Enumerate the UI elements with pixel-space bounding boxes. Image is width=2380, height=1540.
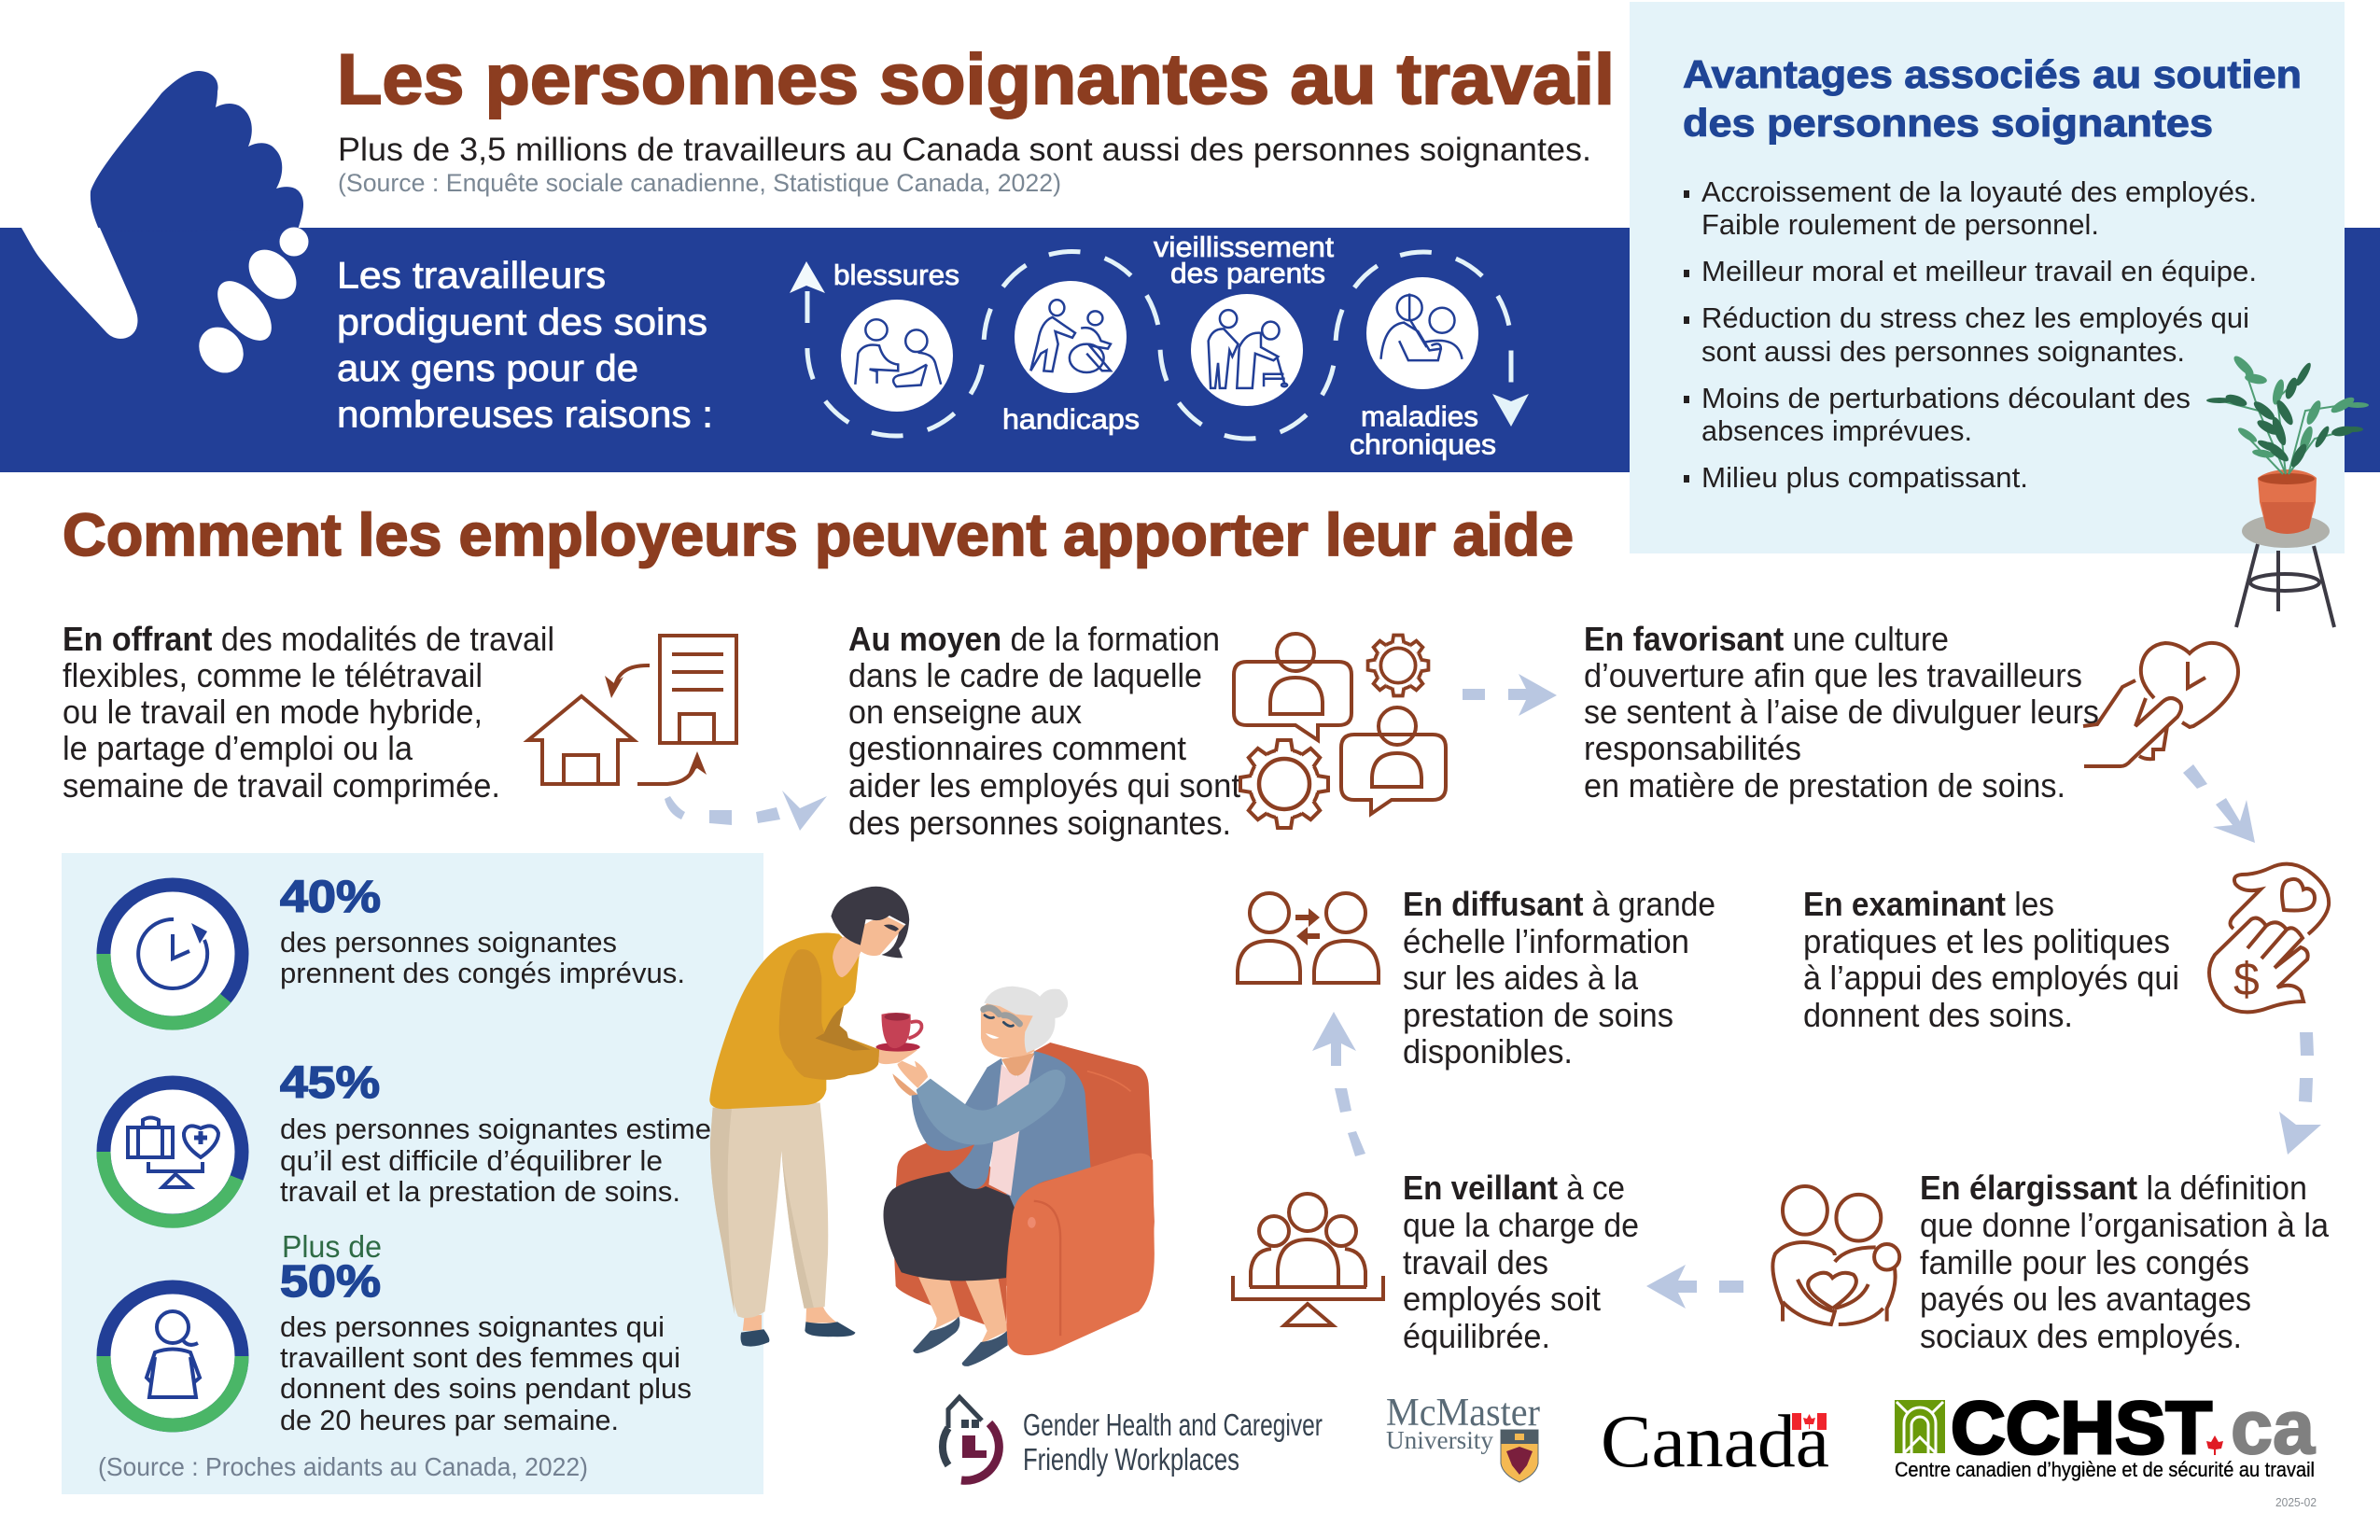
section heading: Comment les employeurs peuvent apporter leur aide xyxy=(63,501,1574,568)
subtitle: Plus de 3,5 millions de travailleurs au Canada sont aussi des personnes soignantes. xyxy=(338,132,1591,168)
stat: plus de 50%: donnent des soins pendant plus xyxy=(280,1372,692,1405)
arrow: dashed to step 2 xyxy=(665,791,827,831)
step: En diffusant: sur les aides à la xyxy=(1403,959,1639,997)
source note: (Source : Enquête sociale canadienne, Statistique Canada, 2022) xyxy=(338,169,1061,197)
stat: 45% xyxy=(280,1058,711,1208)
reason: vieillissement des parents: des parents xyxy=(1170,257,1325,289)
arrow: dashed to step 6 xyxy=(1646,1265,1743,1309)
stat ring: 50% xyxy=(104,1287,242,1425)
date code: 2025-02 xyxy=(2275,1495,2317,1509)
icon: family with heart xyxy=(1772,1186,1899,1324)
step: Au moyen: dans le cadre de laquelle xyxy=(848,656,1202,694)
stat: plus de 50%: de 20 heures par semaine. xyxy=(280,1404,619,1436)
icon: helping hand xyxy=(21,71,308,382)
reason: vieillissement des parents xyxy=(1154,231,1334,406)
bullet list: Accroissement de la loyauté des employés. xyxy=(1701,175,2257,208)
step: En examinant: à l’appui des employés qui xyxy=(1803,959,2179,997)
icon: clock xyxy=(138,919,207,988)
logo: Canada wordmark: Canada xyxy=(1601,1401,1829,1483)
reason: handicaps: handicaps xyxy=(1002,403,1140,435)
step: En élargissant xyxy=(1920,1169,2330,1355)
step: En favorisant: d’ouverture afin que les travailleurs xyxy=(1584,656,2082,694)
icon: hand with heart and dollar: $ xyxy=(2233,953,2260,1005)
step: En diffusant: disponibles. xyxy=(1403,1032,1573,1071)
logo: CCHST.ca: CCHST xyxy=(1951,1386,2212,1469)
logo: Gender Health and Caregiver Friendly Workplaces: Gender Health and Caregiver xyxy=(1023,1407,1323,1442)
icon: heart clock in hand xyxy=(2083,643,2238,766)
band statement: Les travailleurs xyxy=(337,256,606,297)
step: En favorisant: en matière de prestation de soins. xyxy=(1584,766,2065,805)
band statement: nombreuses raisons : xyxy=(337,394,713,435)
stat: 40%: des personnes soignantes xyxy=(280,926,617,959)
step: En favorisant: se sentent à l’aise de divulguer leurs xyxy=(1584,693,2099,731)
stat: 40%: prennent des congés imprévus. xyxy=(280,957,685,989)
step: En élargissant: En élargissant la définition xyxy=(1920,1169,2307,1207)
step: En favorisant xyxy=(1584,620,2099,805)
step: En offrant: flexibles, comme le télétravail xyxy=(63,656,483,694)
logo: McMaster University xyxy=(1386,1392,1540,1482)
step: En examinant: donnent des soins. xyxy=(1803,996,2073,1034)
stat: 45%: qu’il est difficile d’équilibrer le xyxy=(280,1144,663,1177)
armchair back xyxy=(894,1043,1155,1324)
icon: training people and gears xyxy=(1234,634,1446,828)
step: En offrant xyxy=(63,620,554,805)
icon: woman xyxy=(147,1311,200,1397)
icon: house and office xyxy=(528,636,737,784)
reason: maladies chroniques: maladies xyxy=(1361,399,1478,433)
logo: CCHST.ca: Centre canadien d’hygiène et de sécurité au travail xyxy=(1895,1458,2315,1481)
bullet list: Faible roulement de personnel. xyxy=(1701,208,2099,241)
reason: maladies chroniques: chroniques xyxy=(1350,427,1496,461)
step: Au moyen: Au moyen de la formation xyxy=(848,620,1220,658)
caregiver xyxy=(709,887,917,1347)
reason: blessures: blessures xyxy=(833,259,959,291)
statistics source note: (Source : Proches aidants au Canada, 2022) xyxy=(98,1452,588,1481)
logo: CCHST.ca: ca xyxy=(2231,1385,2316,1470)
stat: plus de 50%: des personnes soignantes qui xyxy=(280,1310,665,1343)
title: Les personnes soignantes au travail xyxy=(337,40,1615,119)
panel heading: Avantages associés au soutien xyxy=(1683,52,2302,96)
step: En examinant: En examinant les xyxy=(1803,885,2054,923)
step: En élargissant: famille pour les congés xyxy=(1920,1243,2249,1281)
illustration: caregiver serving tea to elderly woman xyxy=(709,887,1155,1366)
step: Au moyen xyxy=(848,620,1240,842)
step: En veillant xyxy=(1403,1169,1639,1355)
step: En veillant: que la charge de xyxy=(1403,1206,1639,1244)
band statement: prodiguent des soins xyxy=(337,302,707,343)
step: En examinant xyxy=(1803,885,2179,1034)
bullet list: Milieu plus compatissant. xyxy=(1701,461,2028,494)
step: En offrant: En offrant des modalités de travail xyxy=(63,620,554,658)
icon: balanced team xyxy=(1233,1194,1383,1325)
stat: 45%: travail et la prestation de soins. xyxy=(280,1175,680,1208)
logo: Gender Health and Caregiver Friendly Workplaces xyxy=(943,1397,1323,1480)
step: Au moyen: des personnes soignantes. xyxy=(848,804,1231,842)
step: En veillant: équilibrée. xyxy=(1403,1317,1550,1355)
panel: statistics xyxy=(62,853,763,1494)
reason: blessures xyxy=(833,259,959,412)
step: En diffusant: échelle l’information xyxy=(1403,922,1689,960)
icon: hand with heart and dollar xyxy=(2209,864,2329,1012)
stat: 45%: 45% xyxy=(280,1058,380,1108)
step: En examinant: pratiques et les politiques xyxy=(1803,922,2170,960)
logo: Gender Health and Caregiver Friendly Workplaces: Friendly Workplaces xyxy=(1023,1442,1239,1477)
step: En veillant: travail des xyxy=(1403,1243,1548,1281)
step: En élargissant: sociaux des employés. xyxy=(1920,1317,2242,1355)
reason: vieillissement des parents: vieillissement xyxy=(1154,231,1334,263)
icon: two people exchanging xyxy=(1238,893,1379,983)
tea cup xyxy=(875,1013,921,1052)
step: En diffusant: prestation de soins xyxy=(1403,996,1673,1034)
stat: 40%: 40% xyxy=(280,873,381,922)
step: En veillant: En veillant à ce xyxy=(1403,1169,1625,1207)
stat: plus de 50%: 50% xyxy=(280,1257,381,1307)
logo: McMaster University: McMaster xyxy=(1386,1392,1540,1435)
arrow: dashed to step 3 xyxy=(1463,674,1557,716)
arrow: dashed upward to step 7 xyxy=(1312,1012,1365,1156)
logo: McMaster University: University xyxy=(1386,1426,1493,1454)
step: En offrant: le partage d’emploi ou la xyxy=(63,729,413,767)
bullet list: Réduction du stress chez les employés qui xyxy=(1701,301,2249,334)
reason: handicaps xyxy=(1002,281,1140,435)
arrow: dashed to step 4 xyxy=(2183,764,2255,843)
step: Au moyen: on enseigne aux xyxy=(848,693,1082,731)
step: Au moyen: gestionnaires comment xyxy=(848,729,1186,767)
step: En offrant: semaine de travail comprimée. xyxy=(63,766,500,805)
step: En diffusant xyxy=(1403,885,1715,1071)
panel heading xyxy=(1683,52,2302,145)
illustration: potted plant on stool xyxy=(2206,354,2369,627)
stat: 45%: des personnes soignantes estime xyxy=(280,1113,711,1145)
bullet list: Meilleur moral et meilleur travail en équipe. xyxy=(1701,255,2257,287)
step: Au moyen: aider les employés qui sont xyxy=(848,766,1240,805)
stat ring: 40% xyxy=(104,885,242,1023)
step: En veillant: employés soit xyxy=(1403,1280,1601,1318)
step: En offrant: ou le travail en mode hybride, xyxy=(63,693,483,731)
panel: avantages xyxy=(1630,2,2345,553)
step: En favorisant: responsabilités xyxy=(1584,729,1801,767)
armchair front xyxy=(1006,1154,1155,1355)
panel heading: des personnes soignantes xyxy=(1683,101,2213,145)
step: En élargissant: que donne l’organisation à la xyxy=(1920,1206,2330,1244)
stat: 40% xyxy=(280,873,685,989)
icon: work-care balance xyxy=(128,1118,218,1187)
step: En élargissant: payés ou les avantages xyxy=(1920,1280,2251,1318)
bullet list: absences imprévues. xyxy=(1701,414,1972,447)
bullet list: sont aussi des personnes soignantes. xyxy=(1701,335,2185,368)
band statement xyxy=(337,256,713,435)
arrow: dashed to step 5 xyxy=(2279,1032,2321,1155)
bullet list xyxy=(1684,175,2257,494)
blue band xyxy=(0,228,2380,472)
stat: plus de 50% xyxy=(280,1229,692,1436)
reason: maladies chroniques xyxy=(1350,277,1496,461)
elderly woman xyxy=(883,987,1091,1366)
logo: CCHST.ca xyxy=(1895,1385,2316,1481)
dashed wave arrow through reasons xyxy=(790,251,1529,439)
band statement: aux gens pour de xyxy=(337,348,638,389)
bullet list: Moins de perturbations découlant des xyxy=(1701,382,2191,414)
step: En favorisant: En favorisant une culture xyxy=(1584,620,1949,658)
stat: plus de 50%: travaillent sont des femmes qui xyxy=(280,1341,680,1374)
stat ring: 45% xyxy=(104,1083,242,1221)
step: En diffusant: En diffusant à grande xyxy=(1403,885,1715,923)
stat: plus de 50%: Plus de xyxy=(282,1229,382,1264)
